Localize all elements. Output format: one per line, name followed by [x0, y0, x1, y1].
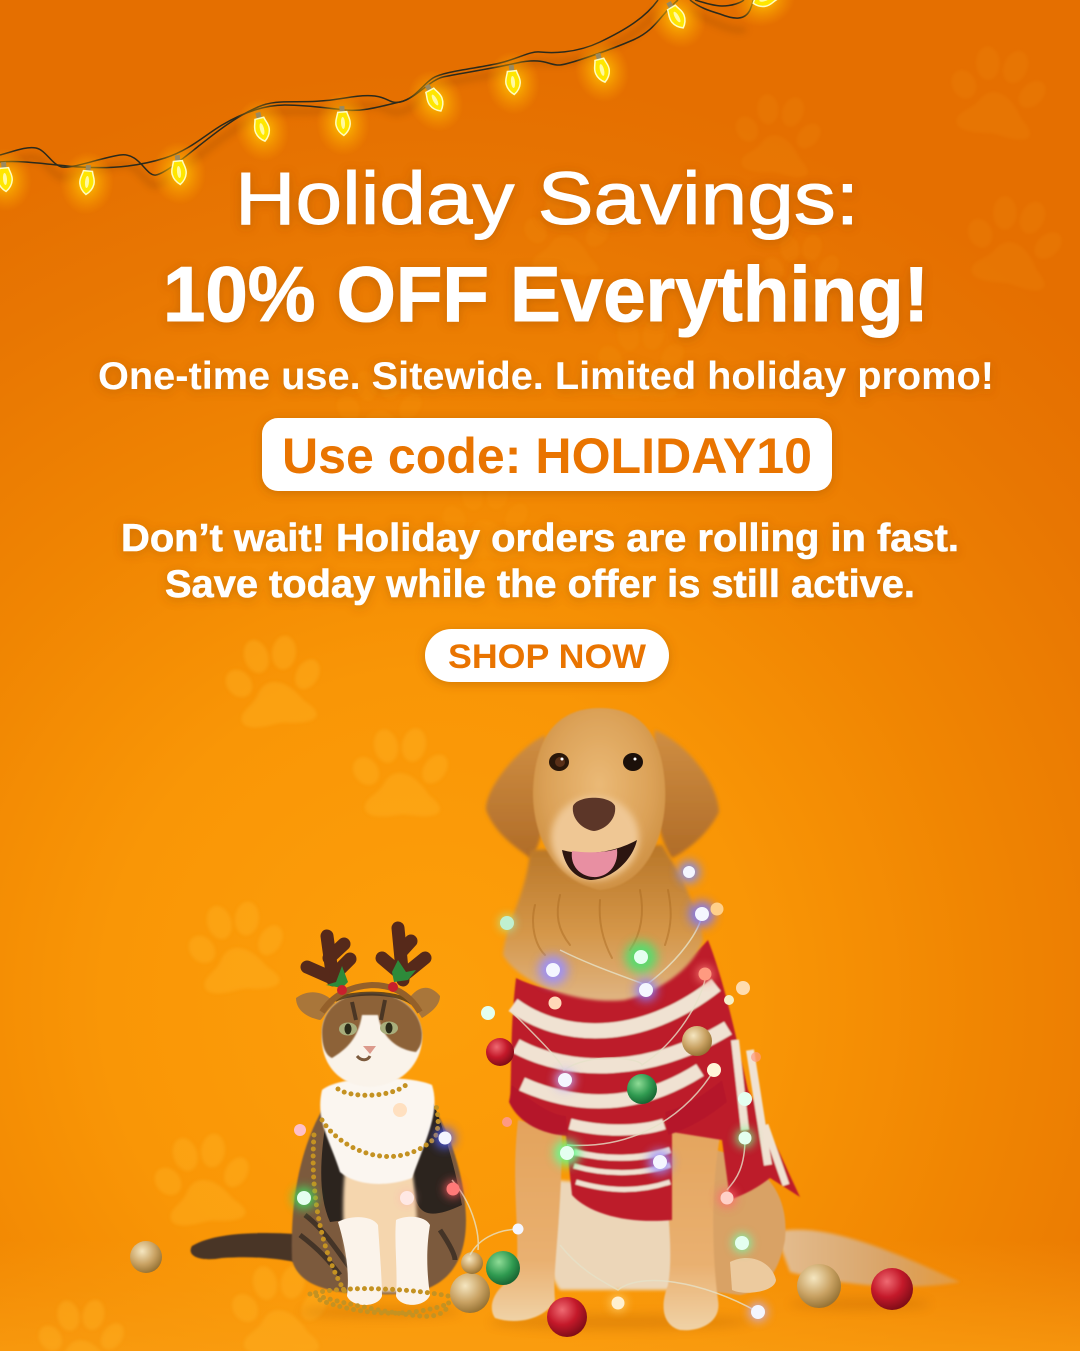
ornaments: [130, 1026, 913, 1337]
cat eyes: [339, 1022, 398, 1036]
cat white chest: [320, 1078, 435, 1184]
dog muzzle: [551, 796, 639, 880]
dog sweater: [509, 940, 800, 1221]
light bulbs: [294, 866, 765, 1319]
heading: 10% OFF Everything: 10% OFF Everything!: [163, 250, 929, 338]
heading: Holiday Savings: Holiday Savings:: [235, 157, 859, 240]
cat tail: [191, 1233, 295, 1262]
cat: [191, 928, 466, 1316]
urgency text: [121, 517, 959, 606]
cat bead necklaces: [310, 1085, 449, 1316]
dog ears: [486, 735, 547, 858]
dog tail: [775, 1230, 960, 1287]
dog: [486, 708, 960, 1330]
paw prints near animals: [34, 629, 453, 1351]
dog rear paw: [730, 1258, 776, 1293]
cat cream belly: [343, 1170, 417, 1292]
dog belly fur: [546, 1180, 683, 1290]
dog nose: [573, 798, 615, 831]
dog eyes: [549, 753, 643, 771]
string lights: [0, 0, 803, 217]
shop now button: [425, 629, 669, 682]
promo code box: Use code: HOLIDAY10: [282, 428, 812, 484]
faint paw prints pattern: [332, 37, 1075, 559]
dog front legs: [492, 1120, 562, 1321]
dog fur strands: [533, 890, 671, 958]
cat head: [322, 993, 422, 1087]
dog neck and chest fur: [503, 845, 703, 1001]
dog head: [533, 708, 665, 890]
light wires: [452, 914, 758, 1312]
shop now button: SHOP NOW: [448, 638, 647, 676]
urgency text: Save today while the offer is still active.: [165, 563, 915, 606]
dog rear body: [700, 1150, 786, 1295]
subheading: One-time use. Sitewide. Limited holiday promo!: [98, 355, 994, 398]
urgency text: Don’t wait! Holiday orders are rolling in fast.: [121, 517, 959, 560]
dog mouth and tongue: [562, 840, 637, 880]
light glows: [293, 861, 767, 1321]
floor shadows: [300, 1298, 930, 1330]
cat front legs: [338, 1217, 382, 1305]
cat dark patches: [321, 1100, 462, 1222]
cat nose: [363, 1046, 376, 1054]
cat body: [292, 1095, 466, 1294]
reindeer headband: [296, 928, 440, 1020]
fairy lights on pets: [293, 861, 767, 1321]
